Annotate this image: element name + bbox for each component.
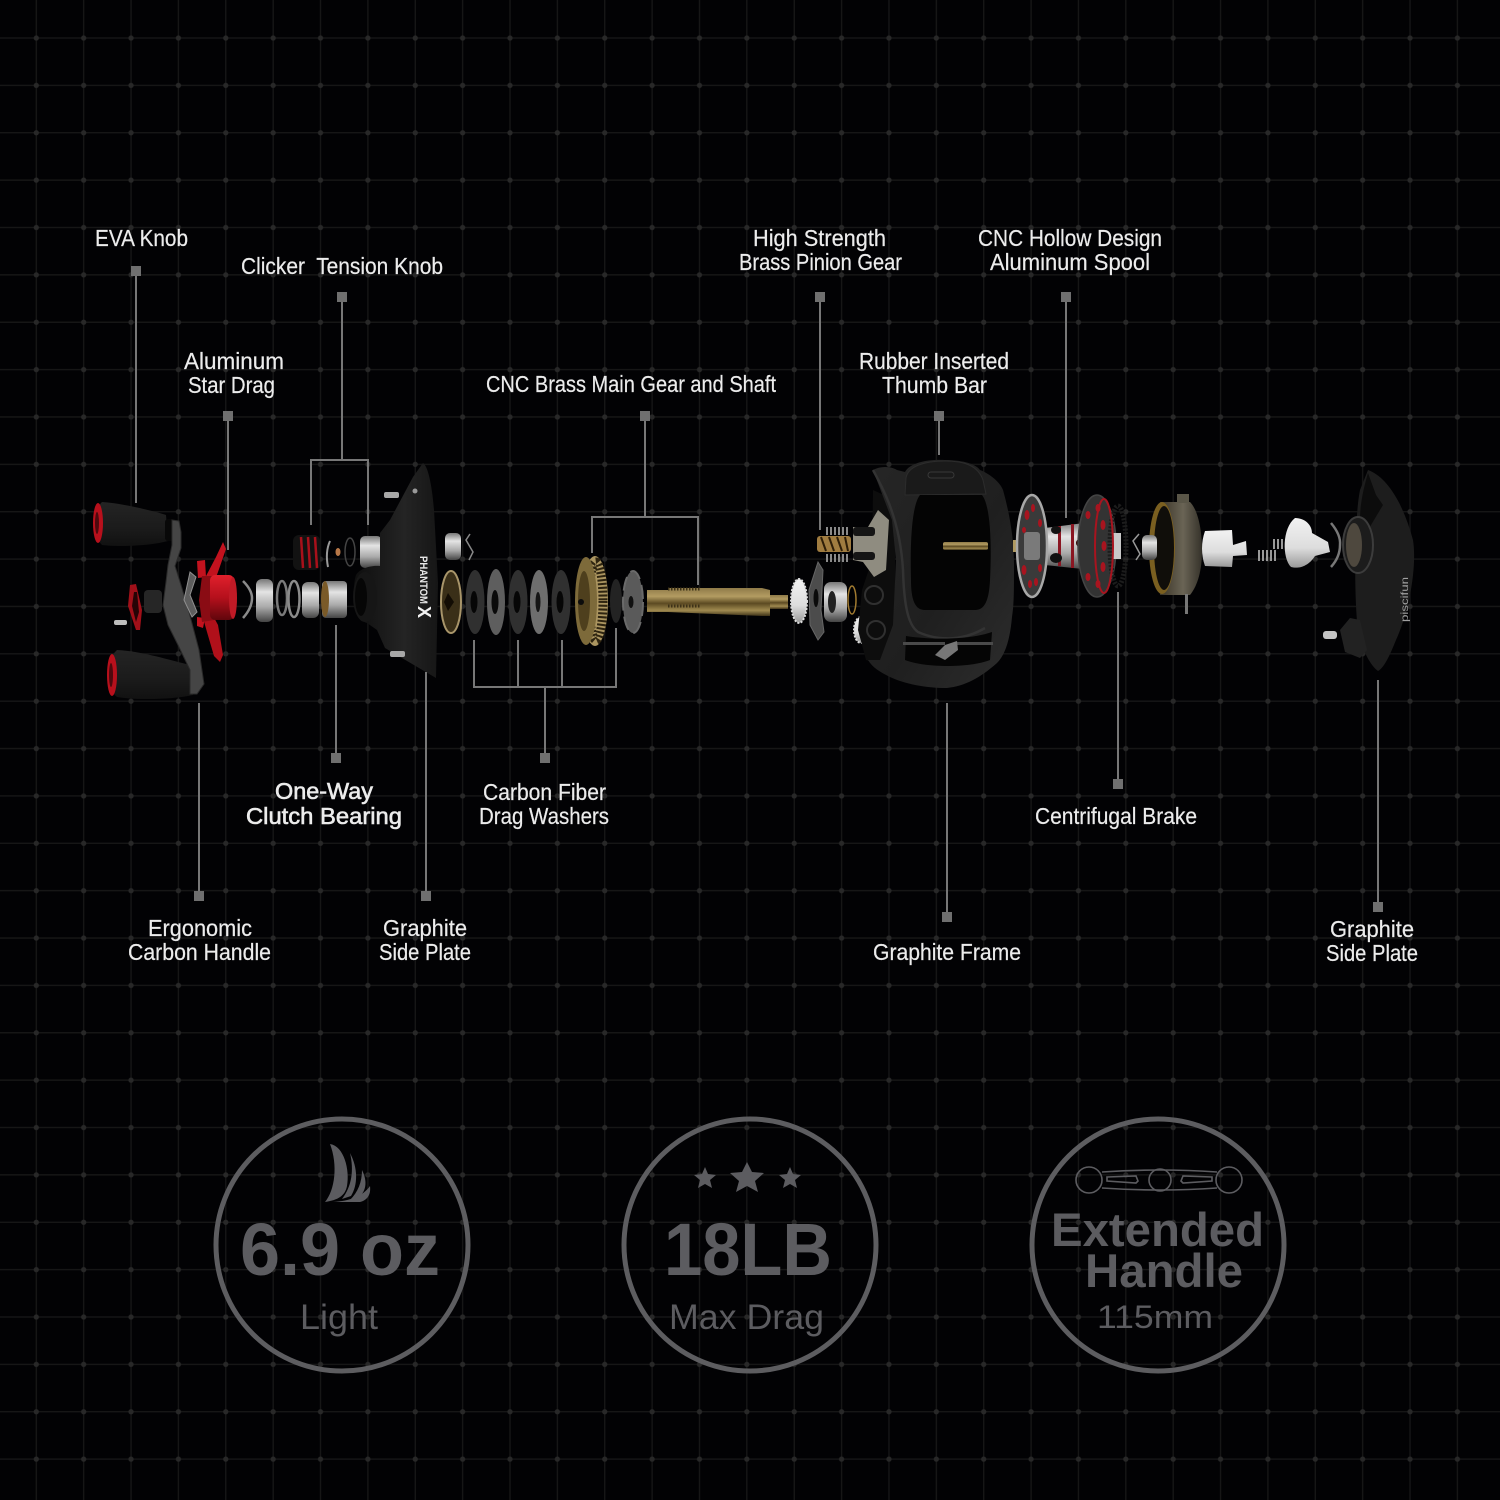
leader: thumb bar [934, 411, 944, 455]
label: Graphite Side Plate (right) [1326, 916, 1418, 966]
leader: frame [942, 703, 952, 922]
right graphite side plate [1323, 470, 1414, 671]
label: Carbon Fiber Drag Washers [479, 779, 609, 829]
label: CNC Brass Main Gear and Shaft: CNC Brass Main Gear and Shaft [486, 371, 777, 397]
label: EVA Knob: EVA Knob [95, 225, 188, 251]
badge: 6.9 oz Light [216, 1119, 468, 1371]
brass main shaft [647, 588, 788, 616]
brass pinion gear and springs [817, 527, 851, 562]
leader: star drag [223, 411, 233, 550]
drag washers and bearings [243, 579, 319, 622]
leader: pinion gear [815, 292, 825, 530]
label: High Strength Brass Pinion Gear: Brass Pinion Gear [739, 249, 902, 275]
leader: drag washers [474, 628, 616, 763]
label: Clicker Tension Knob: Clicker Tension Knob [241, 253, 443, 279]
label: Rubber Inserted Thumb Bar: Thumb Bar [882, 372, 987, 398]
clicker tension knob [293, 535, 382, 570]
heading: Extended: Extended [1051, 1203, 1264, 1256]
aluminum spool [1013, 495, 1126, 597]
label: Ergonomic Carbon Handle [128, 915, 271, 965]
big value: 6.9 oz: 6.9 oz [240, 1208, 440, 1291]
label: One-Way Clutch Bearing: Clutch Bearing [246, 803, 402, 829]
small bearing and clip [445, 533, 473, 560]
label: Graphite Side Plate (right): Side Plate [1326, 940, 1418, 966]
plate logo mark: X [414, 606, 434, 618]
label: Carbon Fiber Drag Washers: Carbon Fiber [483, 779, 606, 805]
leader: main gear and shaft [592, 411, 698, 585]
reel frame [868, 460, 1014, 688]
label: Rubber Inserted Thumb Bar: Rubber Inserted [859, 348, 1009, 374]
label: CNC Hollow Design Aluminum Spool [978, 225, 1162, 275]
badge: Extended Handle 115mm [1032, 1119, 1284, 1371]
white gear and plate [791, 562, 824, 640]
label: Aluminum Star Drag: Star Drag [188, 372, 275, 398]
gear side black parts [858, 490, 895, 665]
exploded reel diagram [93, 460, 1414, 699]
upper EVA knob [93, 502, 174, 546]
retainer cap and nut [114, 584, 162, 630]
caption: Max Drag: Max Drag [669, 1298, 824, 1337]
label: Aluminum Star Drag [184, 348, 284, 398]
clutch bearing [321, 581, 347, 618]
label: Ergonomic Carbon Handle: Carbon Handle [128, 939, 271, 965]
label: CNC Hollow Design Aluminum Spool: Aluminum Spool [990, 249, 1150, 275]
icon: three stars [694, 1162, 801, 1192]
gear side mechanism [853, 510, 889, 639]
caption: Light: Light [300, 1298, 378, 1337]
leader: carbon handle [194, 703, 204, 901]
label: Graphite Frame: Graphite Frame [873, 939, 1021, 965]
label: CNC Hollow Design Aluminum Spool: CNC Hollow Design [978, 225, 1162, 251]
label: Carbon Fiber Drag Washers: Drag Washers [479, 803, 609, 829]
heading: Handle: Handle [1085, 1244, 1243, 1297]
lower EVA knob [107, 650, 193, 699]
leader: centrifugal brake [1113, 592, 1123, 789]
big value: 18LB: 18LB [664, 1208, 832, 1291]
label: High Strength Brass Pinion Gear: High Strength [753, 225, 886, 251]
clip [1133, 534, 1140, 560]
label: Rubber Inserted Thumb Bar [859, 348, 1009, 398]
badge: 18LB Max Drag [624, 1119, 876, 1371]
left graphite side plate [353, 463, 438, 678]
label: Aluminum Star Drag: Aluminum [184, 348, 284, 374]
leader: spool [1061, 292, 1071, 518]
carbon handle [163, 520, 204, 694]
leader: right side plate [1373, 680, 1383, 912]
white brake parts [1202, 518, 1340, 568]
icon: handle outline [1076, 1167, 1242, 1193]
icon: feather wing [325, 1144, 370, 1202]
label: One-Way Clutch Bearing: One-Way [275, 778, 374, 804]
carbon fiber drag washers [441, 569, 570, 635]
label: Graphite Side Plate (right): Graphite [1330, 916, 1414, 942]
leader: clicker tension knob [311, 292, 368, 525]
leader: left side plate [421, 672, 431, 901]
leader: EVA knob [131, 266, 141, 503]
metal clip [184, 572, 197, 617]
label: Graphite Side Plate (left) [379, 915, 471, 965]
leader: clutch bearing [331, 625, 341, 763]
label: Graphite Side Plate (left): Side Plate [379, 939, 471, 965]
label: One-Way Clutch Bearing [246, 778, 402, 829]
label: Centrifugal Brake: Centrifugal Brake [1035, 803, 1197, 829]
bearing, ring and small gear [824, 582, 868, 643]
plate logo: PHANTOM [417, 556, 429, 604]
brass main gear [575, 556, 608, 646]
right plate logo: piscifun [1400, 577, 1411, 622]
label: High Strength Brass Pinion Gear [739, 225, 902, 275]
caption: 115mm: 115mm [1097, 1299, 1213, 1335]
centrifugal brake cup [1142, 494, 1202, 614]
washer and ratchet [610, 571, 643, 633]
label: Graphite Side Plate (left): Graphite [383, 915, 467, 941]
label: Ergonomic Carbon Handle: Ergonomic [148, 915, 252, 941]
red star drag [197, 542, 237, 662]
